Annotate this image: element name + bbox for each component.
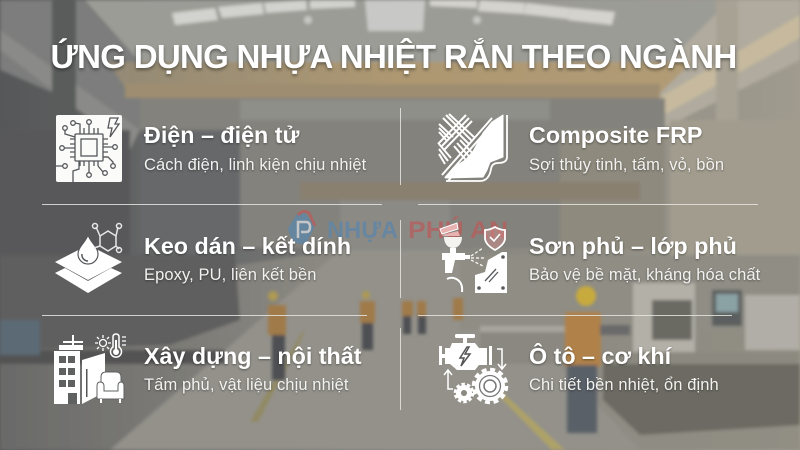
description: Bảo vệ bề mặt, kháng hóa chất	[529, 266, 760, 284]
crane beam	[108, 62, 692, 98]
panel: composite frp	[437, 113, 724, 182]
icon: adhesive layers	[55, 222, 122, 293]
description: Cách điện, linh kiện chịu nhiệt	[144, 156, 366, 174]
panel: ô tô	[439, 334, 719, 404]
icon: woven fibre sheet	[437, 113, 508, 182]
description: Chi tiết bền nhiệt, ổn định	[529, 376, 719, 394]
heading: Điện – điện tử	[144, 122, 299, 148]
panel: điện điện tử	[56, 115, 366, 182]
left machines	[0, 255, 240, 350]
description: Sợi thủy tinh, tấm, vỏ, bồn	[529, 156, 724, 174]
watermark logo: PHÚ AN	[408, 216, 508, 244]
side walls	[0, 0, 140, 130]
workers	[576, 286, 596, 306]
heading: Ô tô – cơ khí	[529, 343, 671, 369]
icon: building, panel and armchair	[54, 333, 126, 404]
description: Epoxy, PU, liên kết bền	[144, 266, 317, 284]
icon: spray gun and panel	[439, 222, 507, 293]
ceiling	[85, 0, 730, 62]
far hall	[140, 98, 665, 248]
watermark logo	[288, 210, 508, 244]
right machines	[460, 255, 800, 330]
panel: sơn phủ	[439, 222, 760, 293]
title: ỨNG DỤNG NHỰA NHIỆT RẮN THEO NGÀNH	[50, 38, 737, 75]
floor lines	[250, 332, 305, 422]
panel: xây dựng	[54, 333, 362, 404]
heading: Xây dựng – nội thất	[144, 343, 362, 369]
panel: keo dán	[55, 222, 351, 293]
heading: Sơn phủ – lớp phủ	[529, 233, 737, 259]
icon: engine and gears	[439, 334, 508, 404]
heading: Keo dán – kết dính	[144, 233, 351, 259]
floor	[0, 250, 800, 450]
description: Tấm phủ, vật liệu chịu nhiệt	[144, 376, 349, 394]
heading: Composite FRP	[529, 122, 702, 148]
icon: circuit chip	[56, 115, 122, 182]
watermark logo: NHỰA	[327, 217, 398, 244]
